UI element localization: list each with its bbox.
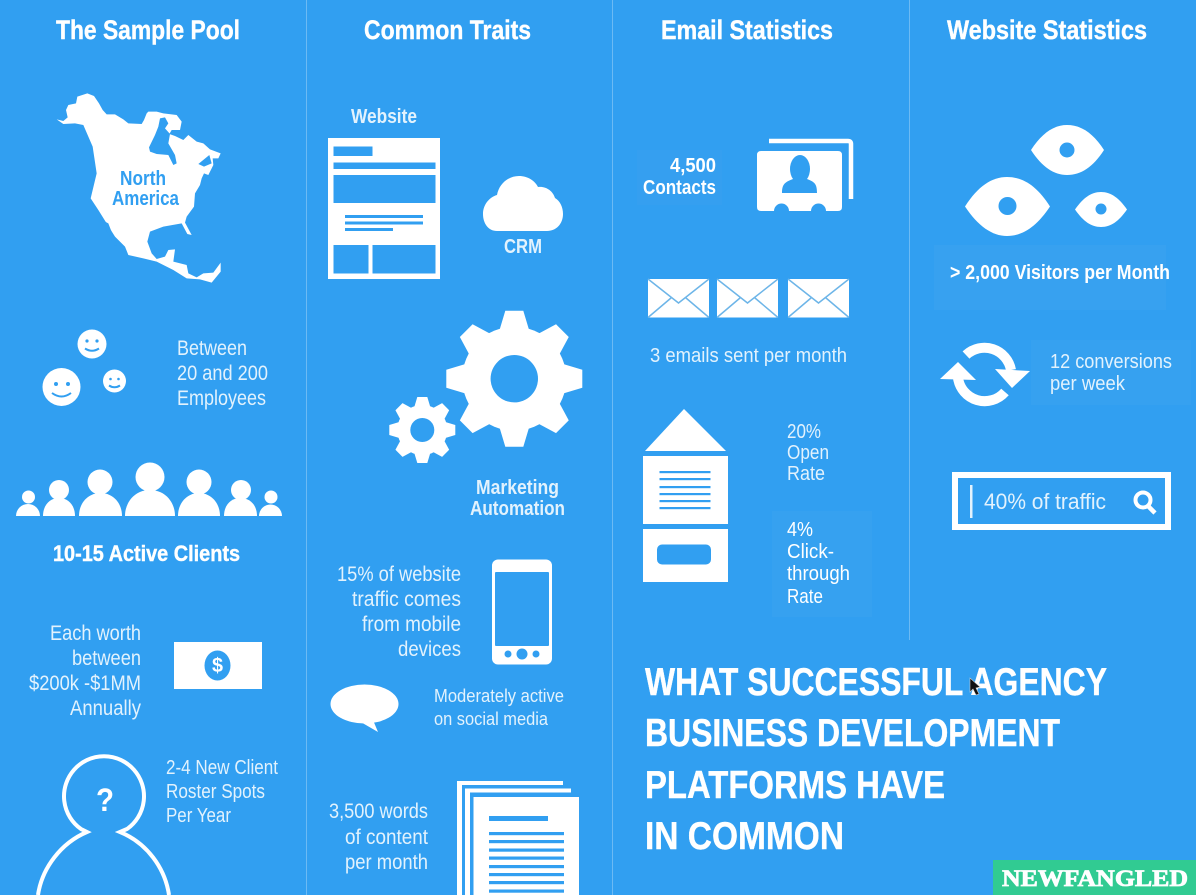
- icon: email tower: [643, 409, 728, 582]
- icon: unknown person: [38, 756, 169, 895]
- text: conversions per week: 12 conversions: [1050, 351, 1172, 373]
- text: new client spots: Per Year: [166, 805, 231, 827]
- icon: crm cloud: [483, 176, 563, 231]
- label: marketing automation: [470, 477, 565, 520]
- text: mobile traffic: 15% of website: [337, 563, 461, 586]
- text: words of content: per month: [345, 851, 428, 874]
- icon: three eyes: [965, 125, 1127, 236]
- text: employees: 20 and 200: [177, 362, 268, 385]
- text: client worth: $200k -$1MM: [29, 672, 141, 695]
- text: mobile traffic: traffic comes: [352, 588, 461, 611]
- icon: smiling faces: [42, 330, 126, 406]
- headline: [645, 661, 1107, 858]
- icon: small gear: [389, 397, 455, 463]
- text: employees: Employees: [177, 387, 266, 410]
- text: click-through rate: 4%: [787, 519, 813, 541]
- text: mobile traffic: [337, 563, 461, 661]
- logo: newfangled: [993, 860, 1196, 895]
- icon: smartphone: [492, 560, 552, 664]
- icon: unknown person: ?: [96, 782, 114, 818]
- icon: large gear: [446, 311, 582, 447]
- text: social media: Moderately active: [434, 686, 564, 706]
- label: marketing automation: Marketing: [476, 477, 559, 499]
- label: crm: CRM: [504, 236, 542, 258]
- text: client worth: Annually: [70, 697, 141, 720]
- icon: speech bubble: [330, 684, 398, 732]
- heading: email statistics: Email Statistics: [661, 15, 833, 45]
- text: click-through rate: Rate: [787, 586, 823, 608]
- label: marketing automation: Automation: [470, 498, 565, 520]
- search box: 40% of traffic: [984, 489, 1106, 514]
- headline: PLATFORMS HAVE: [645, 764, 945, 807]
- text: social media: on social media: [434, 709, 549, 729]
- icon: contact cards: [757, 141, 851, 211]
- heading: common traits: Common Traits: [364, 15, 531, 45]
- text: new client spots: [166, 757, 278, 827]
- icon: website wireframe: [328, 138, 440, 279]
- text: open rate: Rate: [787, 463, 825, 485]
- text: conversions per week: [1031, 340, 1191, 405]
- icon: north america map: North: [120, 168, 166, 190]
- text: visitors per month: [934, 245, 1170, 310]
- icon: dollar bill: [174, 642, 262, 689]
- panel: the sample pool: [16, 15, 282, 895]
- text: click-through rate: Click-: [787, 541, 834, 563]
- heading: the sample pool: The Sample Pool: [56, 15, 240, 45]
- panel: common traits: [328, 15, 582, 895]
- headline: WHAT SUCCESSFUL AGENCY: [645, 661, 1107, 704]
- text: contacts: 4,500: [670, 155, 716, 177]
- panel: email statistics: [637, 15, 872, 617]
- icon: mouse cursor: [970, 678, 980, 695]
- text: mobile traffic: devices: [398, 638, 461, 661]
- icon: document stack: [457, 781, 579, 895]
- text: new client spots: Roster Spots: [166, 781, 265, 803]
- icon: dollar bill: $: [212, 655, 223, 677]
- text: open rate: 20%: [787, 421, 821, 443]
- text: open rate: [787, 421, 829, 485]
- icon: north america map: [57, 93, 221, 283]
- heading: website statistics: Website Statistics: [947, 15, 1147, 45]
- text: employees: Between: [177, 337, 247, 360]
- headline: IN COMMON: [645, 815, 844, 858]
- icon: row of clients: [16, 462, 282, 516]
- headline: BUSINESS DEVELOPMENT: [645, 712, 1060, 755]
- search box: [955, 475, 1168, 527]
- text: emails per month: 3 emails sent per month: [650, 345, 847, 367]
- logo: newfangled: NEWFANGLED: [1002, 866, 1188, 891]
- text: words of content: 3,500 words: [329, 800, 428, 823]
- text: contacts: [637, 150, 722, 205]
- text: mobile traffic: from mobile: [362, 613, 461, 636]
- text: visitors per month: > 2,000 Visitors per Month: [950, 262, 1170, 284]
- text: words of content: [329, 800, 428, 874]
- text: client worth: [29, 622, 141, 720]
- text: open rate: Open: [787, 442, 829, 464]
- text: conversions per week: per week: [1050, 373, 1126, 395]
- icon: refresh arrows: [940, 348, 1030, 401]
- icon: three envelopes: [648, 279, 849, 318]
- text: client worth: Each worth: [50, 622, 141, 645]
- text: words of content: of content: [345, 826, 428, 849]
- text: social media: [434, 686, 564, 729]
- text: employees: [177, 337, 268, 410]
- icon: north america map: America: [112, 188, 180, 210]
- text: click-through rate: through: [787, 563, 850, 585]
- text: active clients: 10-15 Active Clients: [53, 541, 240, 566]
- panel: website statistics: [934, 15, 1191, 527]
- label: website: Website: [351, 106, 417, 128]
- text: client worth: between: [72, 647, 141, 670]
- text: contacts: Contacts: [643, 177, 716, 199]
- text: new client spots: 2-4 New Client: [166, 757, 278, 779]
- text: click-through rate: [772, 511, 872, 617]
